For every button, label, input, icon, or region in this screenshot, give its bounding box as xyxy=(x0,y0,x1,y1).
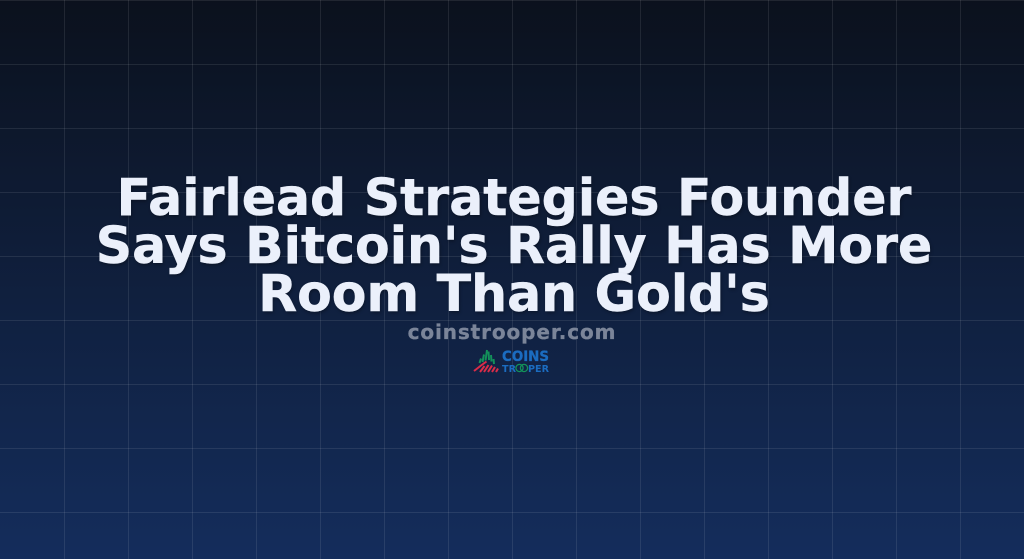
title: Fairlead Strategies Founder xyxy=(117,168,911,227)
title: Says Bitcoin's Rally Has More xyxy=(96,216,932,275)
title xyxy=(96,168,932,323)
title: Room Than Gold's xyxy=(258,264,770,323)
wordmark: PER xyxy=(528,364,549,375)
icon: green and red chart peak xyxy=(474,350,498,372)
wordmark xyxy=(502,349,549,375)
wordmark: COINS xyxy=(502,349,549,365)
website url: coinstrooper.com xyxy=(408,320,616,344)
logo: Coins Trooper xyxy=(473,349,549,375)
wordmark: TR xyxy=(502,364,516,375)
